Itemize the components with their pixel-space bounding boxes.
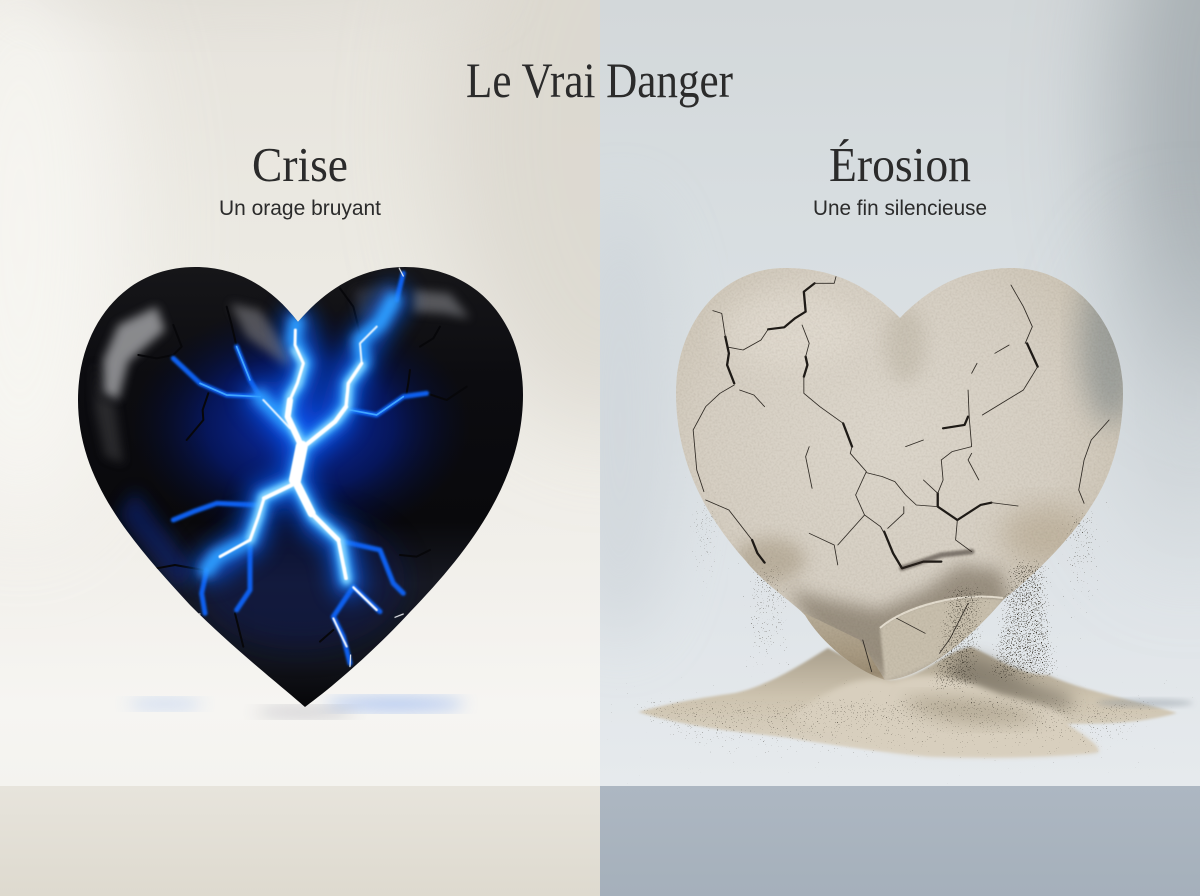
panel: crise background <box>0 0 600 896</box>
blue glow layer <box>210 300 393 583</box>
thin branches <box>173 273 427 663</box>
floor reflection: blue glow under black heart <box>127 698 465 717</box>
heading: crise <box>219 137 381 220</box>
dark cracks <box>138 288 467 647</box>
heading: érosion: Érosion <box>829 137 971 192</box>
icon: cracked eroding stone heart <box>670 255 1144 685</box>
panel: érosion background <box>560 0 1200 896</box>
bright blue channels <box>207 300 393 580</box>
white hot core <box>220 327 377 647</box>
falling sand particles <box>625 505 1165 765</box>
sand pile behind the heart <box>638 647 1193 757</box>
title: Le Vrai Danger <box>466 52 733 108</box>
icon: black heart with blue lightning cracks <box>78 267 523 707</box>
sand mound in front of the heart tip <box>790 676 1098 757</box>
heading: érosion <box>813 137 987 220</box>
reflections <box>93 283 470 463</box>
heading: crise: Un orage bruyant <box>219 197 381 220</box>
heavy cracks <box>725 283 1038 568</box>
thin cracks <box>693 277 1109 672</box>
heading: érosion: Une fin silencieuse <box>813 197 987 220</box>
chips and edge glints <box>188 268 403 667</box>
heading: crise: Crise <box>252 137 348 192</box>
